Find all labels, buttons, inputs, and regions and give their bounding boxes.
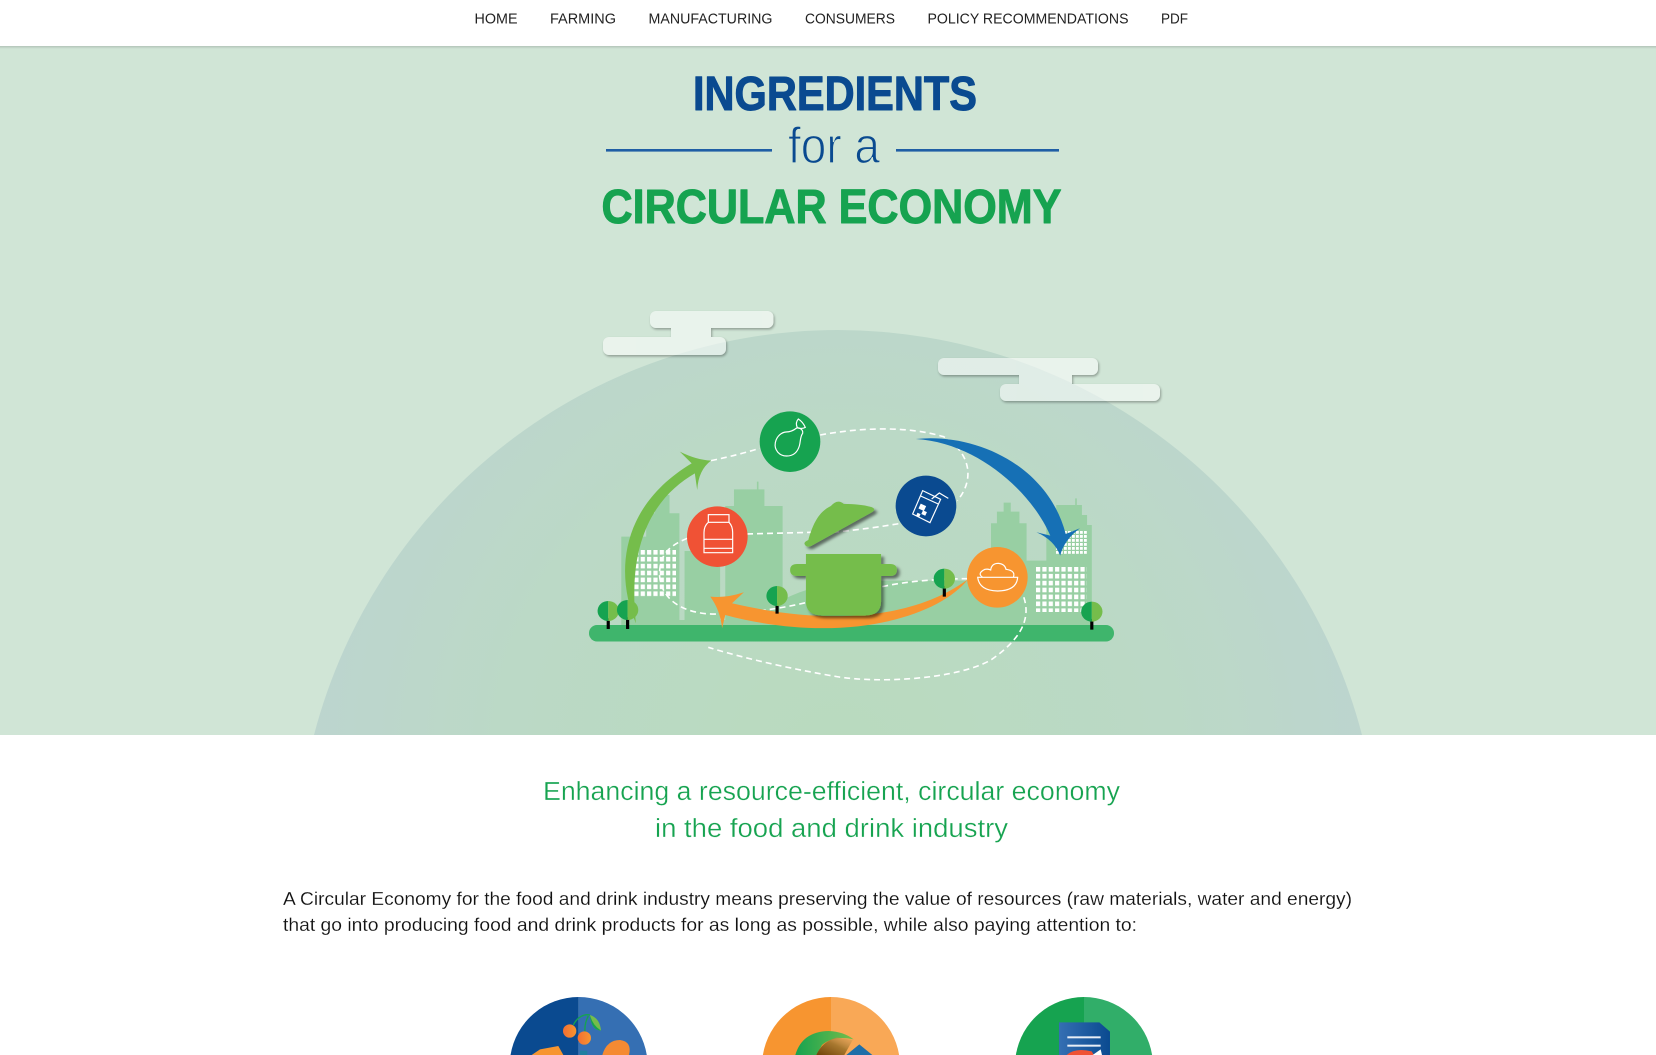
paragraph line 1: A Circular Economy for the food and drink industry means preserving the value of resources (raw materials, water and energy) <box>283 889 1352 909</box>
title line: for a: for a <box>788 117 881 174</box>
hill dome <box>314 330 1362 735</box>
pot lid <box>804 502 874 547</box>
cloud right <box>938 358 1160 401</box>
hero background <box>0 46 1656 735</box>
title line: circular economy: CIRCULAR ECONOMY <box>602 181 1062 234</box>
nav: manufacturing: MANUFACTURING <box>648 12 772 28</box>
nav: home: HOME <box>474 12 518 28</box>
icon: drink circle <box>896 476 956 536</box>
icon: document circle <box>1016 997 1152 1055</box>
icon: jar circle <box>687 506 748 567</box>
title <box>602 68 1062 234</box>
arrow: blue <box>916 438 1080 556</box>
paragraph line 2: that go into producing food and drink products for as long as possible, while also paying attention to: <box>283 915 1137 935</box>
subheading line 2: in the food and drink industry <box>655 815 1008 843</box>
icon: pear circle <box>760 411 820 472</box>
title rule left <box>606 149 772 152</box>
nav: policy recommendations: POLICY RECOMMENDATIONS <box>928 12 1128 28</box>
arrow: green <box>625 452 711 623</box>
intro paragraph <box>283 889 1352 935</box>
building windows <box>628 531 1088 612</box>
title rule right <box>896 149 1059 152</box>
nav: pdf: PDF <box>1161 12 1188 28</box>
title line: ingredients: INGREDIENTS <box>693 68 977 121</box>
dashed circular path <box>660 429 1026 680</box>
cloud left <box>603 311 774 355</box>
icon: bowl circle <box>967 547 1028 608</box>
trees <box>598 569 1102 630</box>
icon: food ingredients circle <box>511 997 647 1055</box>
illustration: city skyline <box>621 482 1092 625</box>
icon: water and energy circle <box>763 997 899 1055</box>
cooking pot <box>790 554 897 616</box>
nav: consumers: CONSUMERS <box>805 12 895 28</box>
ground strip <box>589 625 1114 642</box>
nav: farming: FARMING <box>550 12 616 28</box>
subheading line 1: Enhancing a resource-efficient, circular economy <box>543 778 1120 806</box>
subheading <box>543 778 1120 843</box>
arrow: orange <box>710 579 968 628</box>
navigation bar <box>0 0 1656 49</box>
